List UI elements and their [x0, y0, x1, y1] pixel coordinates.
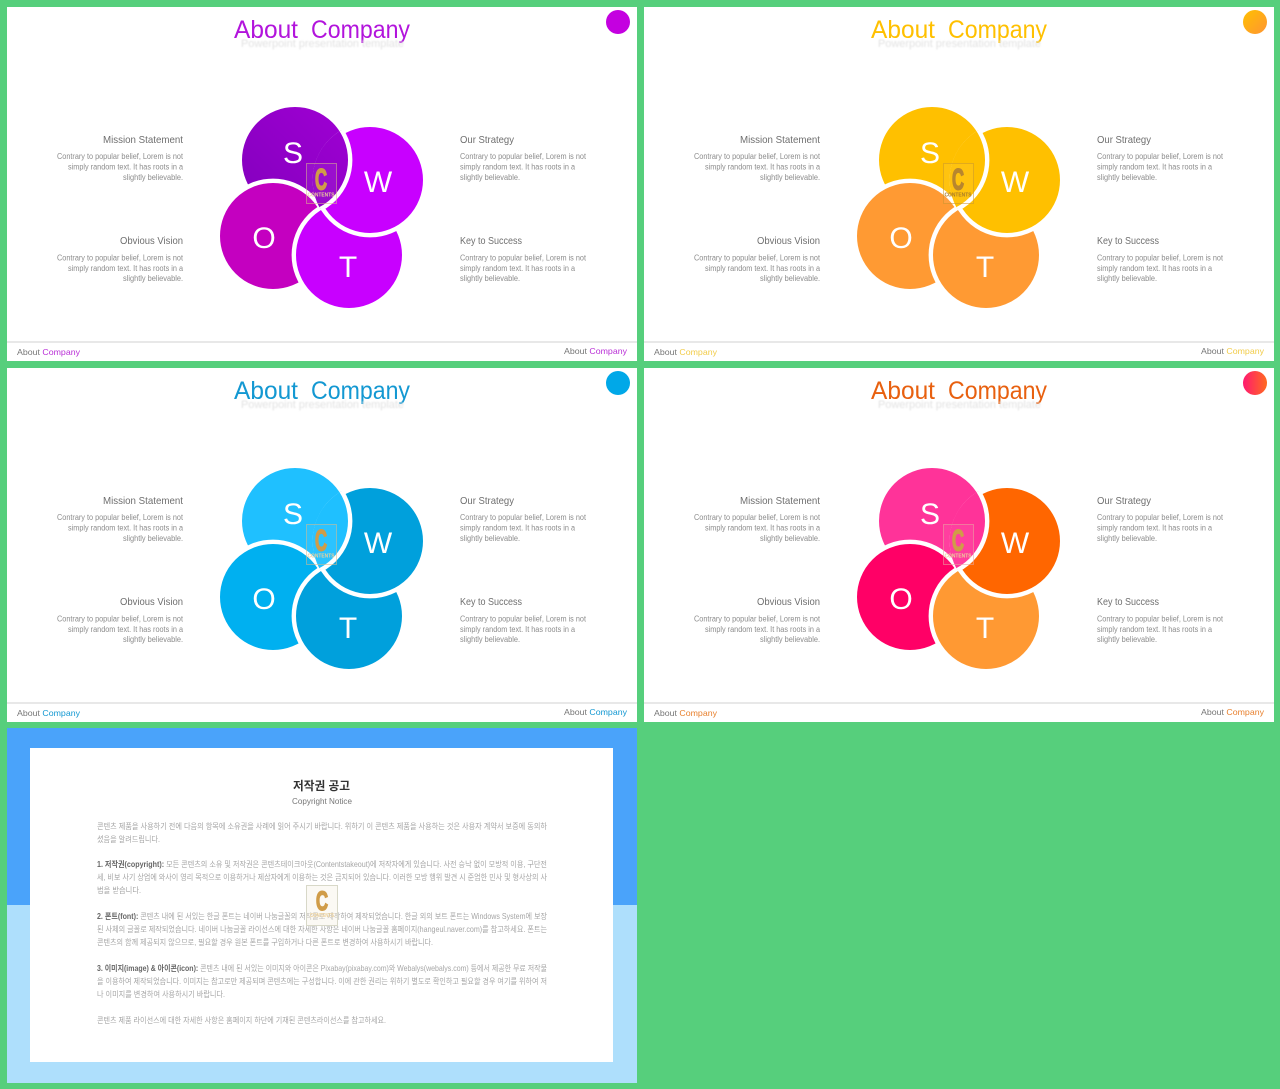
text block: mission statement: Contrary to popular belief, Lorem is not	[694, 152, 821, 161]
text block: obvious vision: Contrary to popular belief, Lorem is not	[694, 254, 821, 262]
text block: key to success	[1097, 235, 1224, 283]
icon: watermark logo: C	[952, 524, 964, 558]
footer	[7, 341, 637, 357]
text block: obvious vision	[57, 235, 184, 283]
chart: swot pinwheel: O	[252, 222, 276, 255]
text block: obvious vision: Obvious Vision	[120, 596, 183, 608]
text block: mission statement	[57, 495, 184, 543]
text block: obvious vision: Obvious Vision	[757, 596, 820, 608]
text block: key to success	[460, 235, 587, 283]
text block: key to success: Key to Success	[1097, 596, 1159, 608]
chart: swot pinwheel: S	[283, 498, 303, 531]
subheading: Copyright Notice	[292, 796, 352, 806]
footer: About Company	[17, 708, 81, 718]
icon: watermark logo: C	[315, 524, 327, 558]
chart: swot pinwheel	[218, 105, 425, 310]
text block: our strategy: Contrary to popular belief, Lorem is not	[460, 513, 587, 522]
text block: key to success: Contrary to popular belief, Lorem is not	[460, 254, 587, 262]
text block: image and icon: 3. 이미지(image) & 아이콘(icon): 콘텐츠 내에 된 서있는 이미지와 아이콘은 Pixabay(pixabay.com)와 Webalys(webalys.com) 등에서 제공한 무료 저작물	[97, 963, 547, 973]
text block: obvious vision: simply random text. It has roots in a	[68, 264, 184, 273]
text block: obvious vision: Obvious Vision	[757, 235, 820, 247]
icon: watermark logo: CONTENTS	[308, 192, 335, 198]
title: Company	[311, 377, 410, 405]
text block: our strategy: slightly believable.	[460, 534, 520, 543]
text block: key to success: Key to Success	[460, 596, 522, 608]
text block: intro: 콘텐츠 제품을 사용하기 전에 다음의 항목에 소유권을 사례에 읽어 주시기 바랍니다. 위하기 이 콘텐츠 제품을 사용하는 것은 사용자 계약서 보증에 동의하	[97, 821, 547, 831]
panel: slide pink orange	[644, 368, 1274, 722]
text block: mission statement: Contrary to popular belief, Lorem is not	[694, 513, 821, 522]
text block: key to success	[460, 596, 587, 644]
icon: watermark logo	[944, 524, 974, 564]
text block: key to success: slightly believable.	[460, 274, 520, 283]
title: Company	[311, 16, 410, 44]
text block: mission statement: Contrary to popular belief, Lorem is not	[57, 513, 184, 522]
text block: key to success: slightly believable.	[1097, 635, 1157, 644]
chart: swot pinwheel: T	[976, 251, 994, 284]
chart: swot pinwheel: T	[339, 251, 357, 284]
text block: key to success: slightly believable.	[460, 635, 520, 644]
text block: mission statement: Mission Statement	[103, 134, 183, 146]
title: About	[871, 377, 935, 405]
footer	[7, 702, 637, 718]
footer: About Company	[1201, 707, 1265, 717]
text block: our strategy: Contrary to popular belief, Lorem is not	[1097, 513, 1224, 522]
text block: our strategy: Contrary to popular belief, Lorem is not	[460, 152, 587, 161]
chart: swot pinwheel: S	[283, 137, 303, 170]
text block: key to success: simply random text. It has roots in a	[460, 264, 576, 273]
text block: our strategy: Our Strategy	[460, 134, 515, 146]
text block: our strategy	[1097, 495, 1224, 543]
title: About	[234, 16, 298, 44]
chart: swot pinwheel: W	[1001, 527, 1030, 560]
chart: swot pinwheel	[855, 105, 1062, 310]
text block: our strategy	[460, 495, 587, 543]
icon: watermark logo: CONTENTS	[308, 554, 335, 560]
text block: copyright: 법을 받습니다.	[97, 885, 141, 895]
text block: license note: 콘텐츠 제품 라이선스에 대한 자세한 사항은 홈페이지 하단에 기재된 콘텐츠라이선스를 참고하세요.	[97, 1015, 386, 1025]
footer: About Company	[564, 346, 628, 356]
footer: About Company	[17, 347, 81, 357]
chart: swot pinwheel: O	[889, 222, 913, 255]
text block: our strategy: Contrary to popular belief, Lorem is not	[1097, 152, 1224, 161]
text block: key to success: simply random text. It has roots in a	[1097, 625, 1213, 634]
text block: obvious vision: simply random text. It has roots in a	[68, 625, 184, 634]
panel: copyright notice	[7, 728, 637, 1083]
text block: obvious vision: simply random text. It has roots in a	[705, 264, 821, 273]
chart: swot pinwheel: W	[1001, 166, 1030, 199]
icon: watermark logo	[306, 886, 338, 926]
icon: corner dot	[1243, 371, 1267, 395]
text block: key to success: Key to Success	[1097, 235, 1159, 247]
text block: image and icon	[97, 963, 547, 999]
chart: swot pinwheel	[855, 466, 1062, 671]
text block: mission statement: simply random text. It has roots in a	[68, 524, 184, 532]
text block: obvious vision: slightly believable.	[123, 274, 183, 283]
text block: mission statement: simply random text. It has roots in a	[68, 162, 184, 172]
text block: obvious vision: slightly believable.	[123, 635, 183, 644]
text block: obvious vision: Contrary to popular belief, Lorem is not	[57, 614, 184, 624]
text block: mission statement: Mission Statement	[740, 134, 820, 146]
text block: our strategy: slightly believable.	[1097, 534, 1157, 543]
text block: mission statement: Mission Statement	[740, 495, 820, 507]
text block: mission statement	[694, 495, 821, 543]
text block: copyright	[97, 859, 547, 895]
icon: watermark logo: C	[315, 164, 327, 196]
footer: About Company	[564, 707, 628, 717]
text block: obvious vision: Contrary to popular belief, Lorem is not	[694, 614, 821, 624]
text block: mission statement	[694, 134, 821, 182]
text block: obvious vision: Contrary to popular belief, Lorem is not	[57, 254, 184, 262]
title: About	[234, 377, 298, 405]
chart: swot pinwheel: T	[976, 612, 994, 645]
subtitle: Powerpoint presentation template	[241, 38, 404, 50]
text block: key to success: Contrary to popular belief, Lorem is not	[1097, 254, 1224, 262]
text block: intro: 셨음을 알려드립니다.	[97, 834, 160, 844]
icon: watermark logo: C	[316, 886, 328, 916]
text block: key to success: Key to Success	[460, 235, 522, 247]
text block: mission statement	[57, 134, 184, 182]
subtitle: Powerpoint presentation template	[878, 38, 1041, 50]
text block: our strategy: simply random text. It has roots in a	[1097, 162, 1213, 172]
text block: mission statement: Contrary to popular belief, Lorem is not	[57, 152, 184, 161]
chart: swot pinwheel: T	[339, 612, 357, 645]
footer: About Company	[1201, 346, 1265, 356]
icon: watermark logo	[306, 164, 336, 204]
title	[234, 377, 410, 405]
text block: key to success: Contrary to popular belief, Lorem is not	[1097, 614, 1224, 624]
text block: image and icon: 나 이미지를 변경하여 사용하시기 바랍니다.	[97, 989, 225, 999]
text block: mission statement: slightly believable.	[760, 173, 820, 182]
text block: font	[97, 911, 547, 947]
footer: About Company	[654, 708, 718, 718]
title: Company	[948, 16, 1047, 44]
text block: font: 2. 폰트(font): 콘텐츠 내에 된 서있는 한글 폰트는 네이버 나눔글꼴의 저작물로 제작하여 제작되었습니다. 한글 외의 보트 폰트는 Windows System에 보장	[97, 911, 547, 921]
text block: mission statement: simply random text. It has roots in a	[705, 524, 821, 532]
title	[871, 16, 1047, 44]
heading: copyright notice: 저작권 공고	[293, 778, 350, 793]
chart: swot pinwheel: W	[364, 527, 393, 560]
text block: obvious vision: slightly believable.	[760, 635, 820, 644]
title: Company	[948, 377, 1047, 405]
panel: slide blue	[7, 368, 637, 722]
chart: swot pinwheel: O	[252, 583, 276, 616]
icon: corner dot	[1243, 10, 1267, 34]
text block: intro	[97, 821, 547, 844]
panel: slide purple	[7, 7, 637, 361]
icon: corner dot	[606, 371, 630, 395]
icon: watermark logo: CONTENTS	[310, 913, 335, 919]
text block: our strategy	[460, 134, 587, 182]
icon: watermark logo	[306, 524, 336, 564]
text block: our strategy: slightly believable.	[460, 173, 520, 182]
text block: mission statement: slightly believable.	[760, 534, 820, 543]
title: About	[871, 16, 935, 44]
text block: obvious vision	[694, 235, 821, 283]
text block: obvious vision: Obvious Vision	[120, 235, 183, 247]
footer	[644, 702, 1274, 718]
chart: swot pinwheel	[218, 466, 425, 671]
text block: our strategy: Our Strategy	[1097, 495, 1152, 507]
text block: copyright: 세, 비보 사기 상업에 와사이 영리 목적으로 이용하거나 제삼자에게 이용하는 것은 금지되어 있습니다. 이러한 모방 행위 발견 시 준엄한 민사 및 형사상의 사	[97, 872, 547, 882]
icon: watermark logo: C	[952, 164, 964, 196]
text block: image and icon: 을 이용하여 제작되었습니다. 이미지는 참고로만 제공되며 콘텐츠에는 구성합니다. 이에 관한 권리는 위하기 별도로 확인하고 필요할 경우 여기를 위하여 저	[97, 976, 547, 986]
footer	[644, 341, 1274, 357]
chart: swot pinwheel: W	[364, 166, 393, 199]
text block: our strategy: simply random text. It has roots in a	[460, 162, 576, 172]
text block: key to success	[1097, 596, 1224, 644]
text block: font: 콘텐츠의 함께 제공되지 않으므로, 필요할 경우 원본 폰트를 구입하거나 다른 폰트로 변경하여 사용하시기 바랍니다.	[97, 937, 433, 947]
text block: key to success: Contrary to popular belief, Lorem is not	[460, 614, 587, 624]
text block: key to success: simply random text. It has roots in a	[1097, 264, 1213, 273]
text block: obvious vision: simply random text. It has roots in a	[705, 625, 821, 634]
text block: mission statement: slightly believable.	[123, 534, 183, 543]
chart: swot pinwheel: O	[889, 583, 913, 616]
text block: key to success: slightly believable.	[1097, 274, 1157, 283]
footer: About Company	[654, 347, 718, 357]
text block: mission statement: Mission Statement	[103, 495, 183, 507]
text block: our strategy: Our Strategy	[1097, 134, 1152, 146]
icon: corner dot	[606, 10, 630, 34]
subtitle: Powerpoint presentation template	[241, 399, 404, 411]
chart: swot pinwheel: S	[920, 137, 940, 170]
text block: our strategy: slightly believable.	[1097, 173, 1157, 182]
subtitle: Powerpoint presentation template	[878, 399, 1041, 411]
text block: our strategy	[1097, 134, 1224, 182]
icon: watermark logo: CONTENTS	[944, 554, 972, 560]
text block: obvious vision	[57, 596, 184, 644]
icon: watermark logo: CONTENTS	[944, 192, 972, 198]
icon: watermark logo	[944, 164, 974, 204]
text block: obvious vision: slightly believable.	[760, 274, 820, 283]
text block: key to success: simply random text. It has roots in a	[460, 625, 576, 634]
chart: swot pinwheel: S	[920, 498, 940, 531]
title	[871, 377, 1047, 405]
text block: obvious vision	[694, 596, 821, 644]
text block: copyright: 1. 저작권(copyright): 모든 콘텐츠의 소유 및 저작권은 콘텐츠테이크아웃(Contentstakeout)에 저작자에게 있습니다. 사전 승낙 없이 모방적 이용, 구단전	[97, 859, 547, 869]
panel: slide yellow	[644, 7, 1274, 361]
text block: font: 된 사체의 글꼴로 제작되었습니다. 네이버 나눔글꼴 라이선스에 대한 자세한 사항은 네이버 나눔글꼴 홈페이지(hangeul.naver.com)를 참고하세요. 폰트는	[97, 924, 547, 934]
title	[234, 16, 410, 44]
text block: our strategy: simply random text. It has roots in a	[460, 524, 576, 532]
text block: mission statement: simply random text. It has roots in a	[705, 162, 821, 172]
text block: our strategy: Our Strategy	[460, 495, 515, 507]
text block: mission statement: slightly believable.	[123, 173, 183, 182]
text block: our strategy: simply random text. It has roots in a	[1097, 524, 1213, 532]
